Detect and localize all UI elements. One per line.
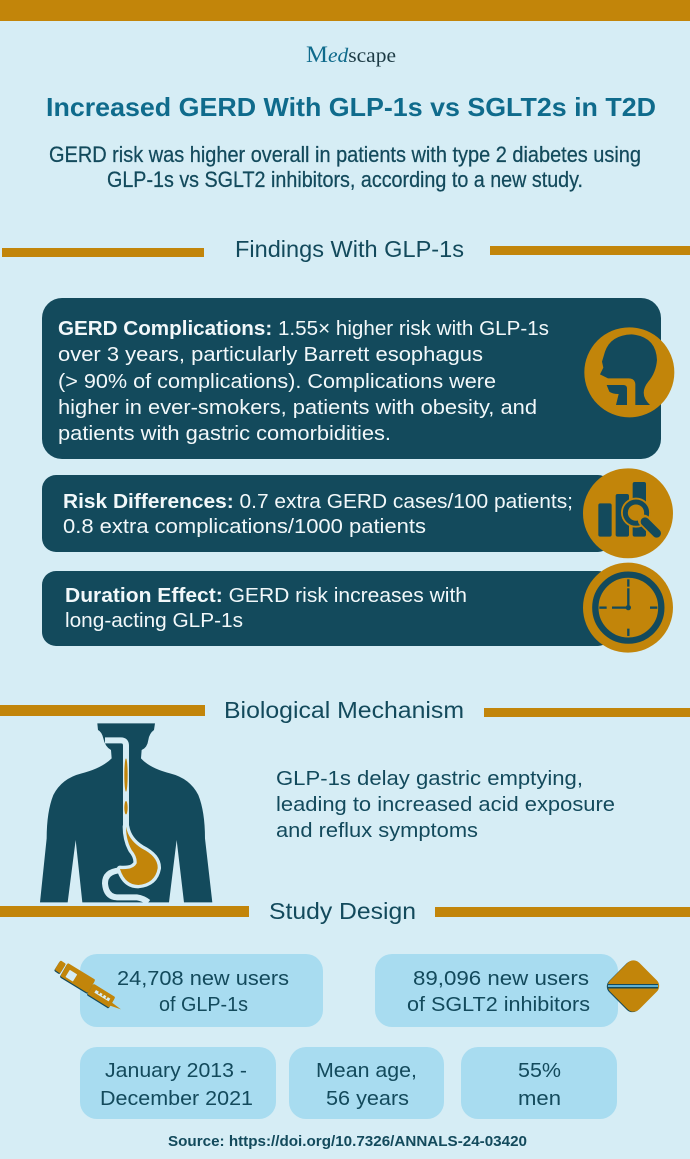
panel: GERD complications: GERD Complications: 1.55× higher risk with GLP-1s [58, 317, 549, 340]
stat box: mean age: Mean age, [316, 1059, 417, 1082]
stat box: GLP-1 users: of GLP-1s [159, 993, 248, 1016]
title: Increased GERD With GLP-1s vs SGLT2s in T2D [46, 92, 656, 122]
icon: diamond pill [604, 957, 662, 1015]
panel: risk differences [42, 475, 612, 552]
section heading: biological mechanism [0, 697, 690, 723]
section heading: findings [2, 236, 690, 262]
text: mechanism description: and reflux symptoms [276, 819, 478, 842]
panel: duration effect [42, 571, 612, 646]
panel: GERD complications: patients with gastric comorbidities. [58, 422, 391, 445]
panel: GERD complications: (> 90% of complications). Complications were [58, 370, 496, 393]
logo: Medscape [306, 42, 396, 67]
panel: duration effect: long-acting GLP-1s [65, 609, 243, 632]
section heading: findings: Findings With GLP-1s [235, 236, 464, 262]
section heading: study design: Study Design [269, 898, 416, 924]
text: mechanism description: leading to increased acid exposure [276, 793, 615, 816]
source: Source: https://doi.org/10.7326/ANNALS-24-03420 [168, 1133, 527, 1150]
icon: head and throat [584, 327, 674, 417]
subtitle: GERD risk was higher overall in patients with type 2 diabetes using [49, 142, 641, 167]
stat box: dates: December 2021 [100, 1087, 253, 1110]
stat box: GLP-1 users: 24,708 new users [117, 967, 289, 990]
stat box: SGLT2 users: of SGLT2 inhibitors [407, 993, 590, 1016]
icon: injection pen [56, 962, 121, 1009]
stat box: dates: January 2013 - [105, 1059, 247, 1082]
panel: risk differences: 0.8 extra complications/1000 patients [63, 515, 426, 538]
panel: GERD complications: over 3 years, particularly Barrett esophagus [58, 343, 483, 366]
stat box: SGLT2 users: 89,096 new users [413, 967, 589, 990]
section heading: study design [0, 898, 690, 924]
stat box: SGLT2 users [375, 954, 618, 1027]
panel: GERD complications: higher in ever-smokers, patients with obesity, and [58, 396, 537, 419]
icon: clock [583, 563, 673, 653]
stat box: mean age [289, 1047, 444, 1119]
stat box: men: 55% [518, 1059, 561, 1082]
text: mechanism description: GLP-1s delay gastric emptying, [276, 767, 583, 790]
text: mechanism description [276, 767, 615, 842]
icon: chart with magnifier [583, 468, 673, 558]
panel: GERD complications [42, 298, 661, 459]
stat box: mean age: 56 years [326, 1087, 409, 1110]
stat box: dates [80, 1047, 276, 1119]
icon: torso with esophagus and stomach [40, 723, 212, 902]
top bar [0, 0, 690, 21]
subtitle: GLP-1s vs SGLT2 inhibitors, according to a new study. [107, 167, 583, 192]
subtitle [49, 142, 641, 192]
stat box: men: men [518, 1087, 561, 1110]
panel: duration effect: Duration Effect: GERD risk increases with [65, 584, 467, 607]
stat box: GLP-1 users [80, 954, 323, 1027]
section heading: biological mechanism: Biological Mechanism [224, 697, 464, 723]
stat box: men [461, 1047, 617, 1119]
panel: risk differences: Risk Differences: 0.7 extra GERD cases/100 patients; [63, 490, 573, 513]
